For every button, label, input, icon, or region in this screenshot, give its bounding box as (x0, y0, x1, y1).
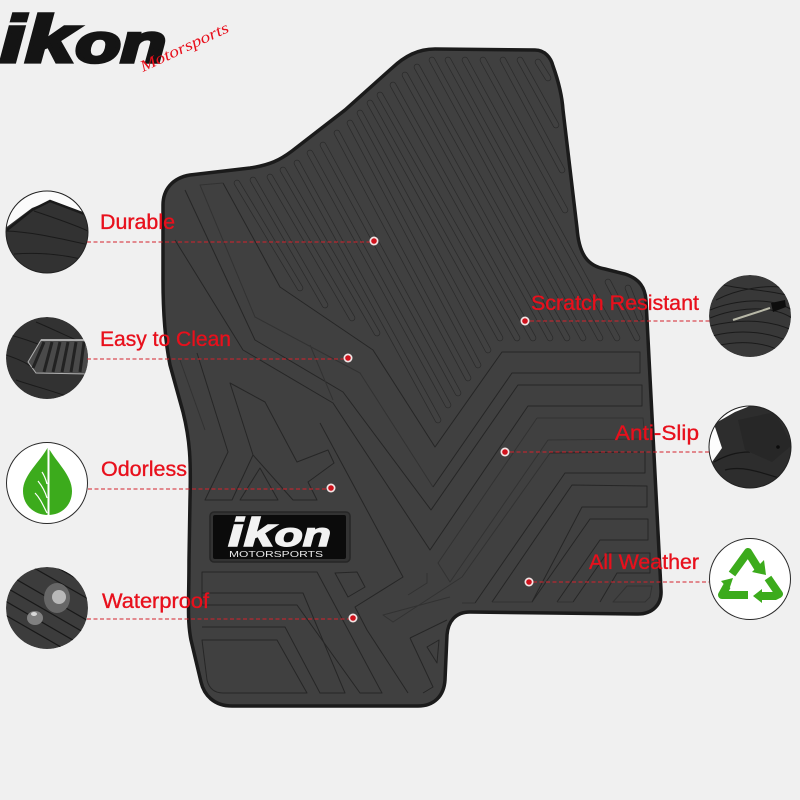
marker dot (326, 484, 336, 492)
callout: Easy to Clean (6, 317, 352, 399)
floor mat (163, 49, 661, 706)
callout: Waterproof (6, 567, 358, 649)
leader line (533, 581, 709, 583)
circle outline (6, 191, 88, 273)
label: Odorless (101, 458, 187, 481)
label: All Weather (589, 551, 699, 574)
marker dot (348, 614, 358, 622)
callout: Odorless (6, 442, 336, 524)
mat logo badge (210, 511, 350, 562)
lower-left grooves (180, 345, 447, 693)
brand logo (0, 2, 232, 76)
callout: Scratch Resistant (520, 275, 792, 357)
label: Waterproof (102, 590, 209, 613)
marker dot (344, 354, 352, 362)
label: Anti-Slip (615, 422, 699, 445)
label: Scratch Resistant (531, 292, 699, 315)
leader line (87, 241, 370, 243)
callout: Durable (0, 185, 378, 273)
mat logo badge: MOTORSPORTS (229, 549, 323, 559)
callout: Anti-Slip (500, 400, 792, 488)
leader line (87, 618, 350, 620)
circle outline (709, 406, 791, 488)
label: Durable (100, 211, 175, 234)
leader line (530, 320, 710, 322)
diagonal ribs (237, 60, 640, 420)
logo wordmark: ik on (0, 2, 166, 76)
icon: recycle (710, 538, 790, 620)
icon: brush (6, 317, 90, 399)
leader line (510, 451, 710, 453)
icon: scratch tool (709, 275, 792, 357)
label: Easy to Clean (100, 328, 231, 351)
marker dot (524, 578, 534, 586)
leader line (87, 358, 345, 360)
mat body (163, 49, 661, 706)
callout: All Weather (524, 538, 790, 620)
icon: water drops (6, 567, 88, 649)
icon: leaf (6, 442, 88, 524)
marker dot (500, 448, 510, 456)
chevron grooves (175, 183, 652, 622)
icon: mat underside (710, 406, 790, 488)
icon: durable detail (6, 192, 88, 272)
marker dot (520, 316, 530, 326)
mat logo badge: ik on (228, 511, 331, 555)
logo script: Motorsports (136, 20, 232, 76)
leader line (88, 488, 328, 490)
marker dot (370, 236, 378, 246)
